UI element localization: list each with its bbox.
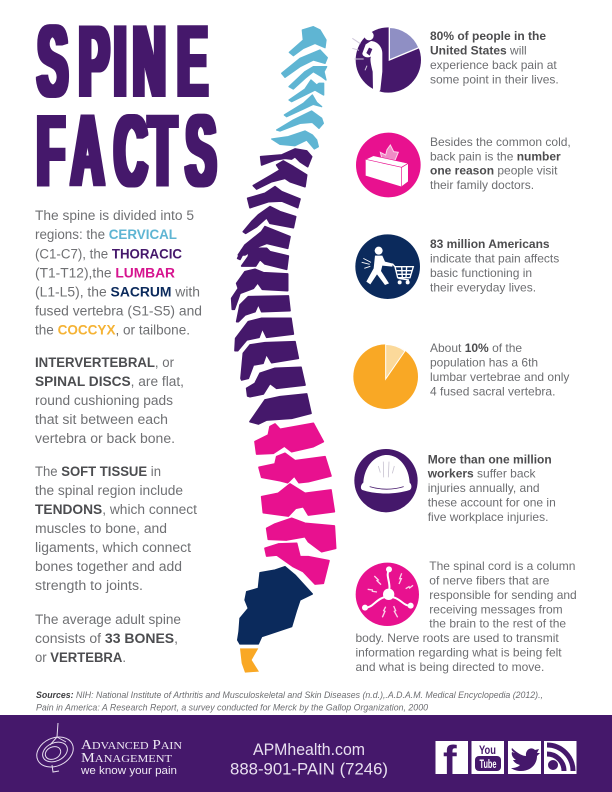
text: spinal cord: responsible for sending and (429, 588, 577, 602)
text: spinal cord: The spinal cord is a column (429, 559, 575, 573)
logo mark (32, 723, 78, 773)
text: number one reason: back pain is the number (430, 149, 561, 163)
text block: soft tissue: the spinal region include (35, 483, 183, 498)
text: 83 million: 83 million Americans (430, 237, 550, 251)
text block: spine regions: (C1-C7), the THORACIC (35, 246, 182, 261)
text: workers: injuries annually, and (428, 481, 540, 495)
text block: spinal discs: round cushioning pads (35, 393, 173, 408)
text: workers: these account for one in (428, 496, 556, 510)
text: spinal cord: the brain to the rest of the (429, 617, 566, 631)
text: 10 percent: 4 fused sacral vertebra. (430, 384, 555, 398)
text block: soft tissue: The SOFT TISSUE in (35, 464, 161, 479)
title (37, 4, 216, 208)
text block: spine regions: The spine is divided into 5 (35, 208, 194, 223)
text: 10 percent: About 10% of the (430, 341, 522, 355)
text block: soft tissue: TENDONS, which connect (35, 502, 197, 517)
text: 83 million: indicate that pain affects (430, 252, 559, 266)
icon: hard hat (354, 449, 418, 512)
icon: facebook (436, 737, 468, 783)
text: spinal cord: and what is being directed to move. (356, 660, 544, 674)
text block: 33 bones (35, 612, 181, 665)
icon: 10 percent pie (353, 344, 418, 409)
text: 80 percent (430, 29, 559, 86)
coccyx (240, 648, 259, 673)
contact details: APMhealth.com (253, 740, 365, 759)
text block: spinal discs: INTERVERTEBRAL, or (35, 355, 175, 370)
title: FACTS (37, 94, 216, 208)
text: spinal cord: of nerve fibers that are (429, 574, 550, 588)
footer band (0, 715, 612, 792)
icon: nerve cell (356, 563, 419, 626)
text block: spine regions: (L1-L5), the SACRUM with (35, 284, 200, 299)
text block: 33 bones: The average adult spine (35, 612, 181, 627)
text: number one reason: one reason people visit (430, 164, 558, 178)
text: number one reason (430, 135, 571, 192)
icon: youtube (472, 741, 504, 774)
text: workers: workers suffer back (427, 467, 537, 481)
text: 80 percent: United States will (430, 44, 527, 58)
thoracic vertebrae (232, 149, 312, 424)
text block: soft tissue: bones together and add (35, 559, 182, 574)
text: 83 million (430, 237, 559, 294)
text: number one reason: Besides the common cold, (430, 135, 571, 149)
text: workers: five workplace injuries. (428, 510, 548, 524)
spine illustration (232, 27, 336, 673)
icon: facebook: f (443, 737, 457, 783)
text: 80 percent: experience back pain at (430, 58, 557, 72)
sacrum (238, 567, 312, 644)
text: 10 percent (430, 341, 569, 398)
text: spinal cord: body. Nerve roots are used to transmit (356, 631, 559, 645)
text block: 33 bones: consists of 33 BONES, (35, 631, 178, 646)
sources: Sources: NIH: National Institute of Arthritis and Musculoskeletal and Skin Diseases (n.d.),.A.D.A.M. Medical Encyclopedia (2012)., (36, 690, 543, 700)
text block: spine regions: fused vertebra (S1-S5) and (35, 303, 202, 318)
text block: soft tissue: strength to joints. (35, 578, 143, 593)
logo: we know your pain (80, 765, 177, 777)
text block: spine regions: (T1-T12),the LUMBAR (35, 265, 175, 280)
icon: person pushing cart (355, 234, 420, 299)
text block: spinal discs: that sit between each (35, 412, 168, 427)
contact details: 888-901-PAIN (7246) (230, 760, 388, 778)
text block: spine regions: regions: the CERVICAL (35, 227, 177, 242)
text: spinal cord: information regarding what is being felt (356, 646, 562, 660)
icon: tissue box (356, 133, 421, 197)
text block: spine regions (35, 208, 202, 337)
sources: Pain in America: A Research Report, a survey conducted for Merck by the Gallop Organization, 2000 (36, 702, 429, 712)
text: workers (427, 452, 556, 524)
text: spinal cord (356, 559, 577, 674)
text: spinal cord: receiving messages from (429, 602, 563, 616)
text: 10 percent: population has a 6th (430, 356, 538, 370)
cervical vertebrae (272, 27, 327, 149)
text block: spine regions: the COCCYX, or tailbone. (35, 322, 190, 337)
text: 80 percent: 80% of people in the (430, 29, 546, 43)
text block: soft tissue: muscles to bone, and (35, 521, 167, 536)
logo: MANAGEMENT (81, 751, 172, 766)
text block: soft tissue (35, 464, 197, 593)
text: number one reason: their family doctors. (430, 178, 534, 192)
lumbar vertebrae (255, 423, 336, 584)
text block: spinal discs: SPINAL DISCS, are flat, (35, 374, 184, 389)
icon: back pain pie (352, 27, 421, 93)
icon: twitter (508, 741, 541, 774)
title: SPINE (37, 4, 208, 118)
text block: 33 bones: or VERTEBRA. (35, 650, 126, 665)
text: 80 percent: some point in their lives. (430, 72, 559, 86)
text: 10 percent: lumbar vertebrae and only (430, 370, 569, 384)
contact details (230, 740, 388, 778)
text block: spinal discs: vertebra or back bone. (35, 431, 175, 446)
text block: spinal discs (35, 355, 184, 446)
text: 83 million: basic functioning in (430, 266, 532, 280)
icon: youtube: You (479, 743, 496, 757)
text: 83 million: their everyday lives. (430, 280, 536, 294)
icon: rss (544, 741, 576, 774)
icon: youtube: Tube (480, 759, 496, 771)
logo (32, 723, 182, 777)
logo text: ADVANCED PAIN (81, 738, 182, 753)
sources (36, 690, 543, 712)
text block: soft tissue: ligaments, which connect (35, 540, 191, 555)
text: workers: More than one million (428, 452, 552, 466)
